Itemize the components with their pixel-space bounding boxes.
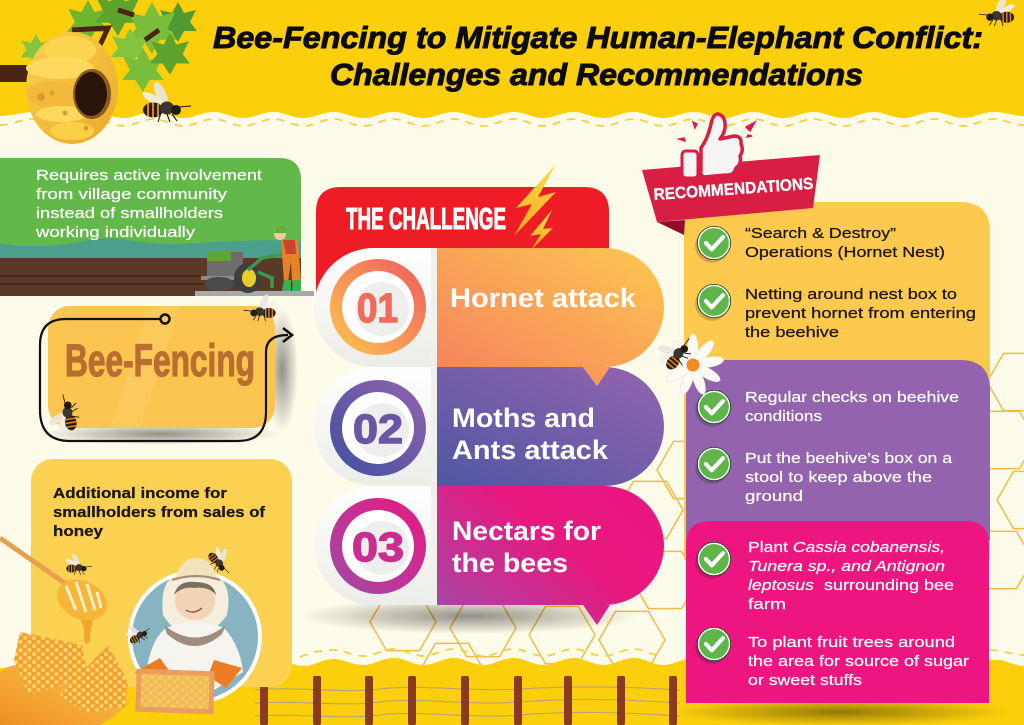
bottom yellow band with wavy edge	[0, 658, 1024, 725]
check icon 1	[695, 226, 731, 263]
panel: additional income	[0, 459, 292, 725]
check icon 4	[695, 447, 731, 484]
check icon 6	[695, 627, 731, 664]
number badge 03: 03	[352, 524, 404, 570]
text: plant cassia: Tunera sp., and Antignon	[748, 559, 945, 575]
icon: bee near beekeeper	[122, 617, 154, 648]
text: plant cassia	[748, 540, 954, 613]
text: additional income: Additional income for	[53, 486, 227, 502]
text: search and destroy: Operations (Hornet Nest)	[745, 245, 945, 261]
icon: bee on dipper	[65, 553, 92, 575]
text: recommendations: RECOMMENDATIONS	[653, 175, 814, 204]
number badge 01: 01	[357, 285, 398, 331]
illustration: beehive on tree branch	[0, 0, 197, 144]
honeycomb background pattern	[370, 353, 1024, 701]
number badge 02	[330, 380, 426, 476]
text: search and destroy	[745, 226, 945, 261]
text: fruit trees: the area for source of sugar	[748, 654, 969, 670]
row 1: hornet attack	[314, 248, 664, 386]
fence	[255, 676, 680, 725]
panel: village community	[0, 158, 314, 296]
icon: bee on beekeeper hat	[204, 542, 240, 579]
text: Bee-Fencing: Bee-Fencing	[65, 335, 255, 386]
check icon 5	[695, 542, 731, 579]
text: plant cassia: surrounding bee	[824, 578, 954, 594]
text: hornet attack: Hornet attack	[450, 283, 637, 313]
title	[213, 20, 983, 92]
row 3: nectars for the bees	[314, 486, 664, 625]
text: beehive box on stool: ground	[745, 489, 803, 505]
title: Bee-Fencing to Mitigate Human-Elephant Conflict:	[213, 20, 983, 55]
text: netting: Netting around nest box to	[745, 287, 957, 303]
text: fruit trees: or sweet stuffs	[748, 673, 862, 689]
check icon 3	[695, 390, 731, 427]
top yellow banner with wavy edge	[0, 0, 1024, 118]
panel: recommendations pink	[686, 521, 989, 703]
icon: bee on daisy	[649, 325, 724, 396]
panel: recommendations yellow	[684, 202, 990, 560]
illustration: farmer with tractor	[195, 226, 314, 296]
icon: bee top of box	[244, 293, 277, 321]
row 2: moths and ants attack	[314, 367, 664, 486]
text: regular checks: conditions	[745, 409, 822, 425]
icon: bee near hive	[141, 80, 191, 122]
text: plant cassia: leptosus	[748, 578, 815, 594]
text: beehive box on stool: stool to keep above the	[745, 470, 932, 486]
text: moths and ants attack: Ants attack	[452, 435, 609, 465]
text: village community: from village community	[36, 187, 228, 203]
ribbon: recommendations	[642, 114, 820, 235]
icon: lightning bolts	[514, 164, 556, 250]
check icon 2	[695, 284, 731, 321]
text: regular checks	[745, 390, 959, 425]
text: additional income	[53, 486, 265, 540]
illustration: honey dipper and honeycomb	[0, 538, 130, 725]
text: moths and ants attack	[452, 403, 609, 465]
text: village community: working individually	[35, 225, 196, 241]
text: village community: instead of smallholders	[36, 206, 223, 222]
icon: thumbs up	[679, 114, 755, 178]
text: plant cassia: Plant Cassia cobanensis,	[748, 540, 945, 556]
illustration: beekeeper	[130, 558, 260, 714]
text: additional income: smallholders from sales of	[53, 505, 265, 521]
text: village community: Requires active involvement	[36, 168, 262, 184]
text: netting: the beehive	[745, 325, 839, 341]
panel: recommendations purple	[686, 360, 990, 540]
text: fruit trees	[748, 635, 969, 689]
text: nectars for the bees	[452, 516, 602, 578]
title: Challenges and Recommendations	[330, 57, 863, 92]
shadow under challenge	[300, 598, 640, 634]
number badge 02: 02	[353, 406, 403, 452]
text: beehive box on stool	[745, 451, 953, 505]
text: beehive box on stool: Put the beehive’s box on a	[745, 451, 953, 467]
text: regular checks: Regular checks on beehive	[745, 390, 959, 406]
icon: bee top right	[979, 0, 1016, 26]
text: plant cassia: farm	[748, 597, 786, 613]
text: netting	[745, 287, 976, 341]
text: search and destroy: “Search & Destroy”	[745, 226, 896, 242]
number badge 01	[330, 259, 426, 355]
arrow: bee-fencing outline to challenge	[40, 314, 292, 441]
text: village community	[35, 168, 262, 241]
text: netting: prevent hornet from entering	[745, 306, 976, 322]
shadow under recommendations	[670, 698, 1010, 725]
text: additional income: honey	[53, 524, 104, 540]
number badge 03	[330, 498, 426, 594]
panel: Bee-Fencing label	[40, 293, 298, 445]
text: nectars for the bees: the bees	[452, 548, 568, 578]
text: nectars for the bees: Nectars for	[452, 516, 602, 546]
panel: the challenge	[314, 164, 664, 625]
icon: bee bottom left of box	[43, 392, 82, 436]
text: moths and ants attack: Moths and	[452, 403, 595, 433]
text: fruit trees: To plant fruit trees around	[748, 635, 955, 651]
heading: the challenge: THE CHALLENGE	[346, 201, 506, 236]
